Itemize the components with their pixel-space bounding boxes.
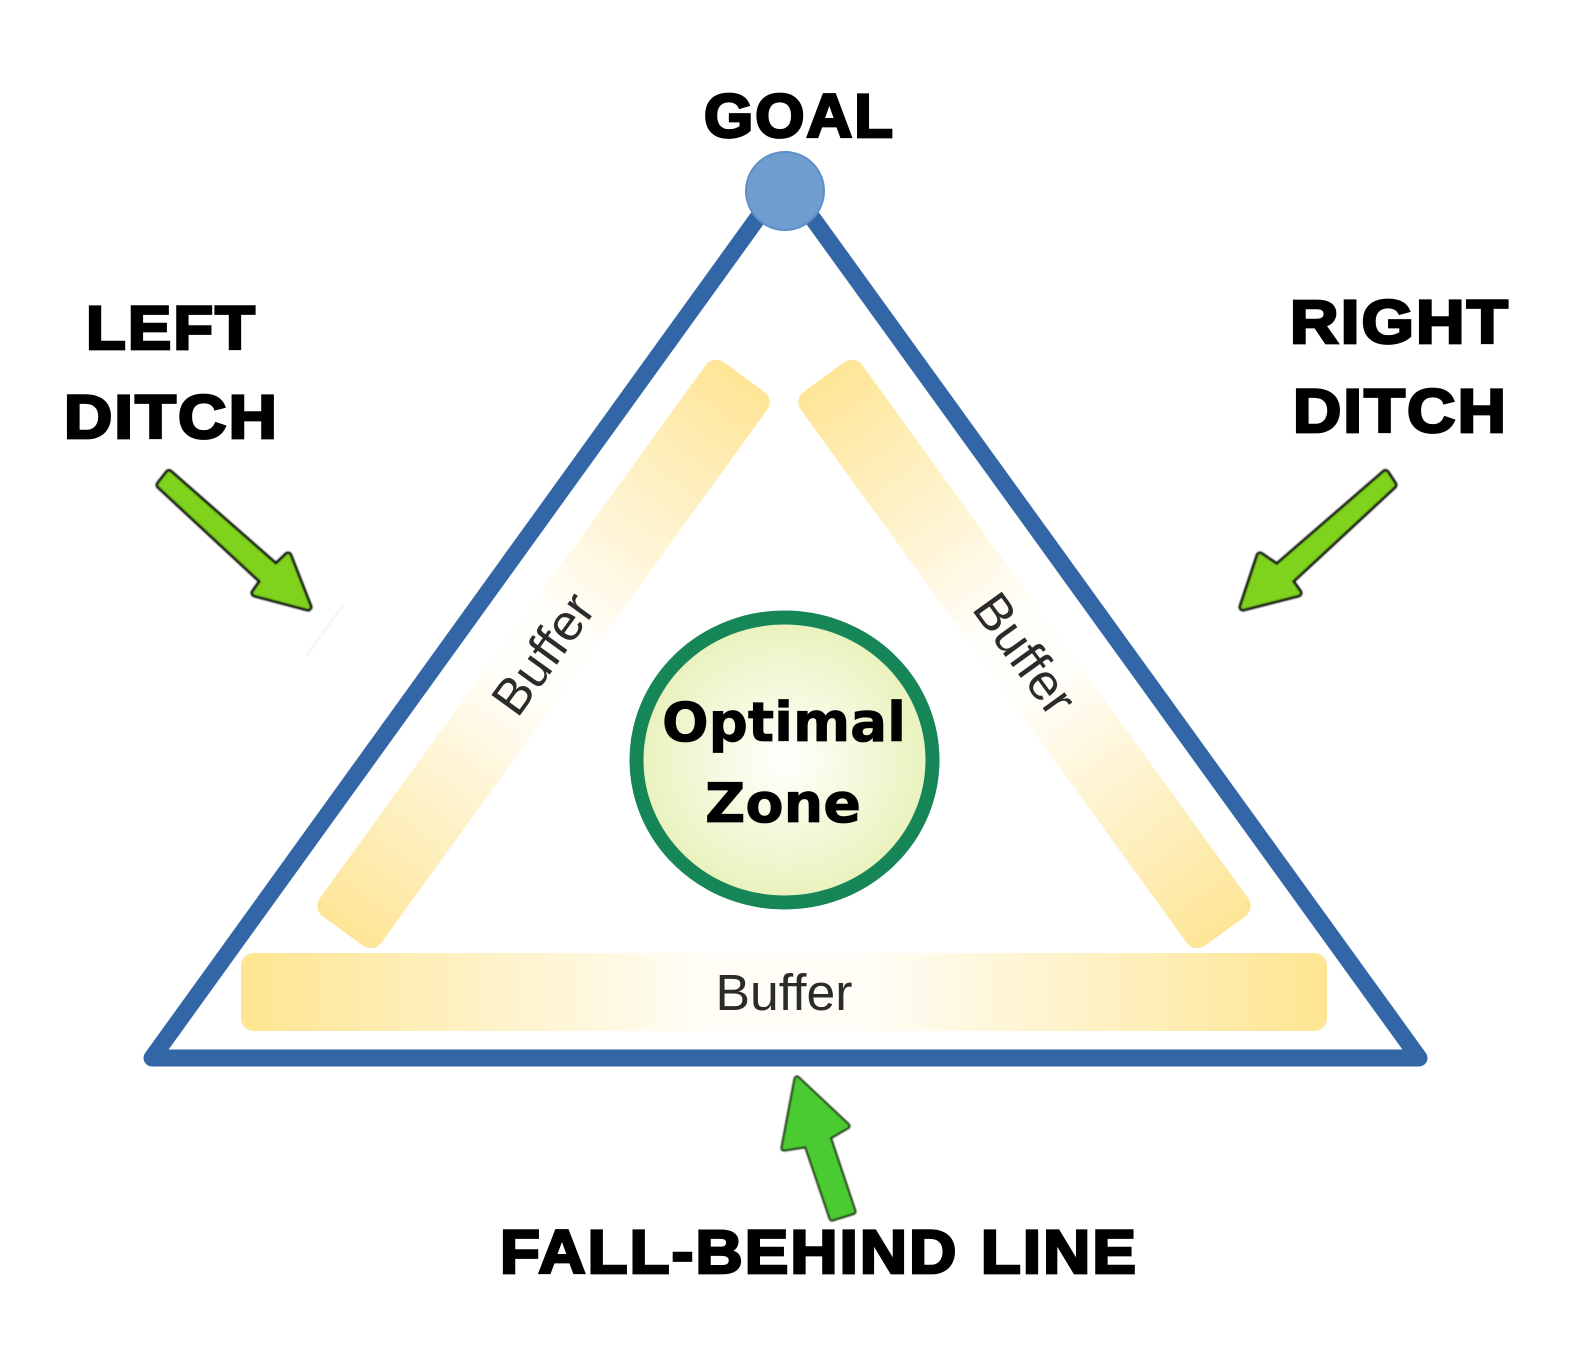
right ditch label bbox=[1290, 288, 1510, 445]
left ditch label bbox=[64, 294, 279, 451]
right ditch label: DITCH bbox=[1293, 377, 1508, 445]
optimal zone: Zone bbox=[705, 772, 861, 835]
arrow: fall-behind line bbox=[784, 1079, 853, 1218]
right buffer bbox=[793, 355, 1256, 953]
optimal zone: Optimal bbox=[662, 691, 906, 754]
right buffer: Buffer bbox=[962, 582, 1088, 726]
goal label: GOAL bbox=[704, 82, 895, 150]
goal circle bbox=[746, 152, 824, 230]
left ditch label: DITCH bbox=[64, 383, 279, 451]
arrow: left ditch bbox=[160, 474, 308, 607]
left buffer: Buffer bbox=[480, 582, 606, 726]
fall-behind line label: FALL-BEHIND LINE bbox=[500, 1218, 1138, 1286]
bottom buffer: Buffer bbox=[716, 964, 853, 1021]
left ditch label: LEFT bbox=[86, 294, 257, 362]
arrow: right ditch bbox=[1243, 474, 1393, 607]
bottom buffer bbox=[241, 953, 1327, 1031]
optimal zone bbox=[636, 618, 932, 902]
right ditch label: RIGHT bbox=[1290, 288, 1510, 356]
triangle outline bbox=[152, 180, 1419, 1058]
left buffer bbox=[312, 355, 775, 953]
